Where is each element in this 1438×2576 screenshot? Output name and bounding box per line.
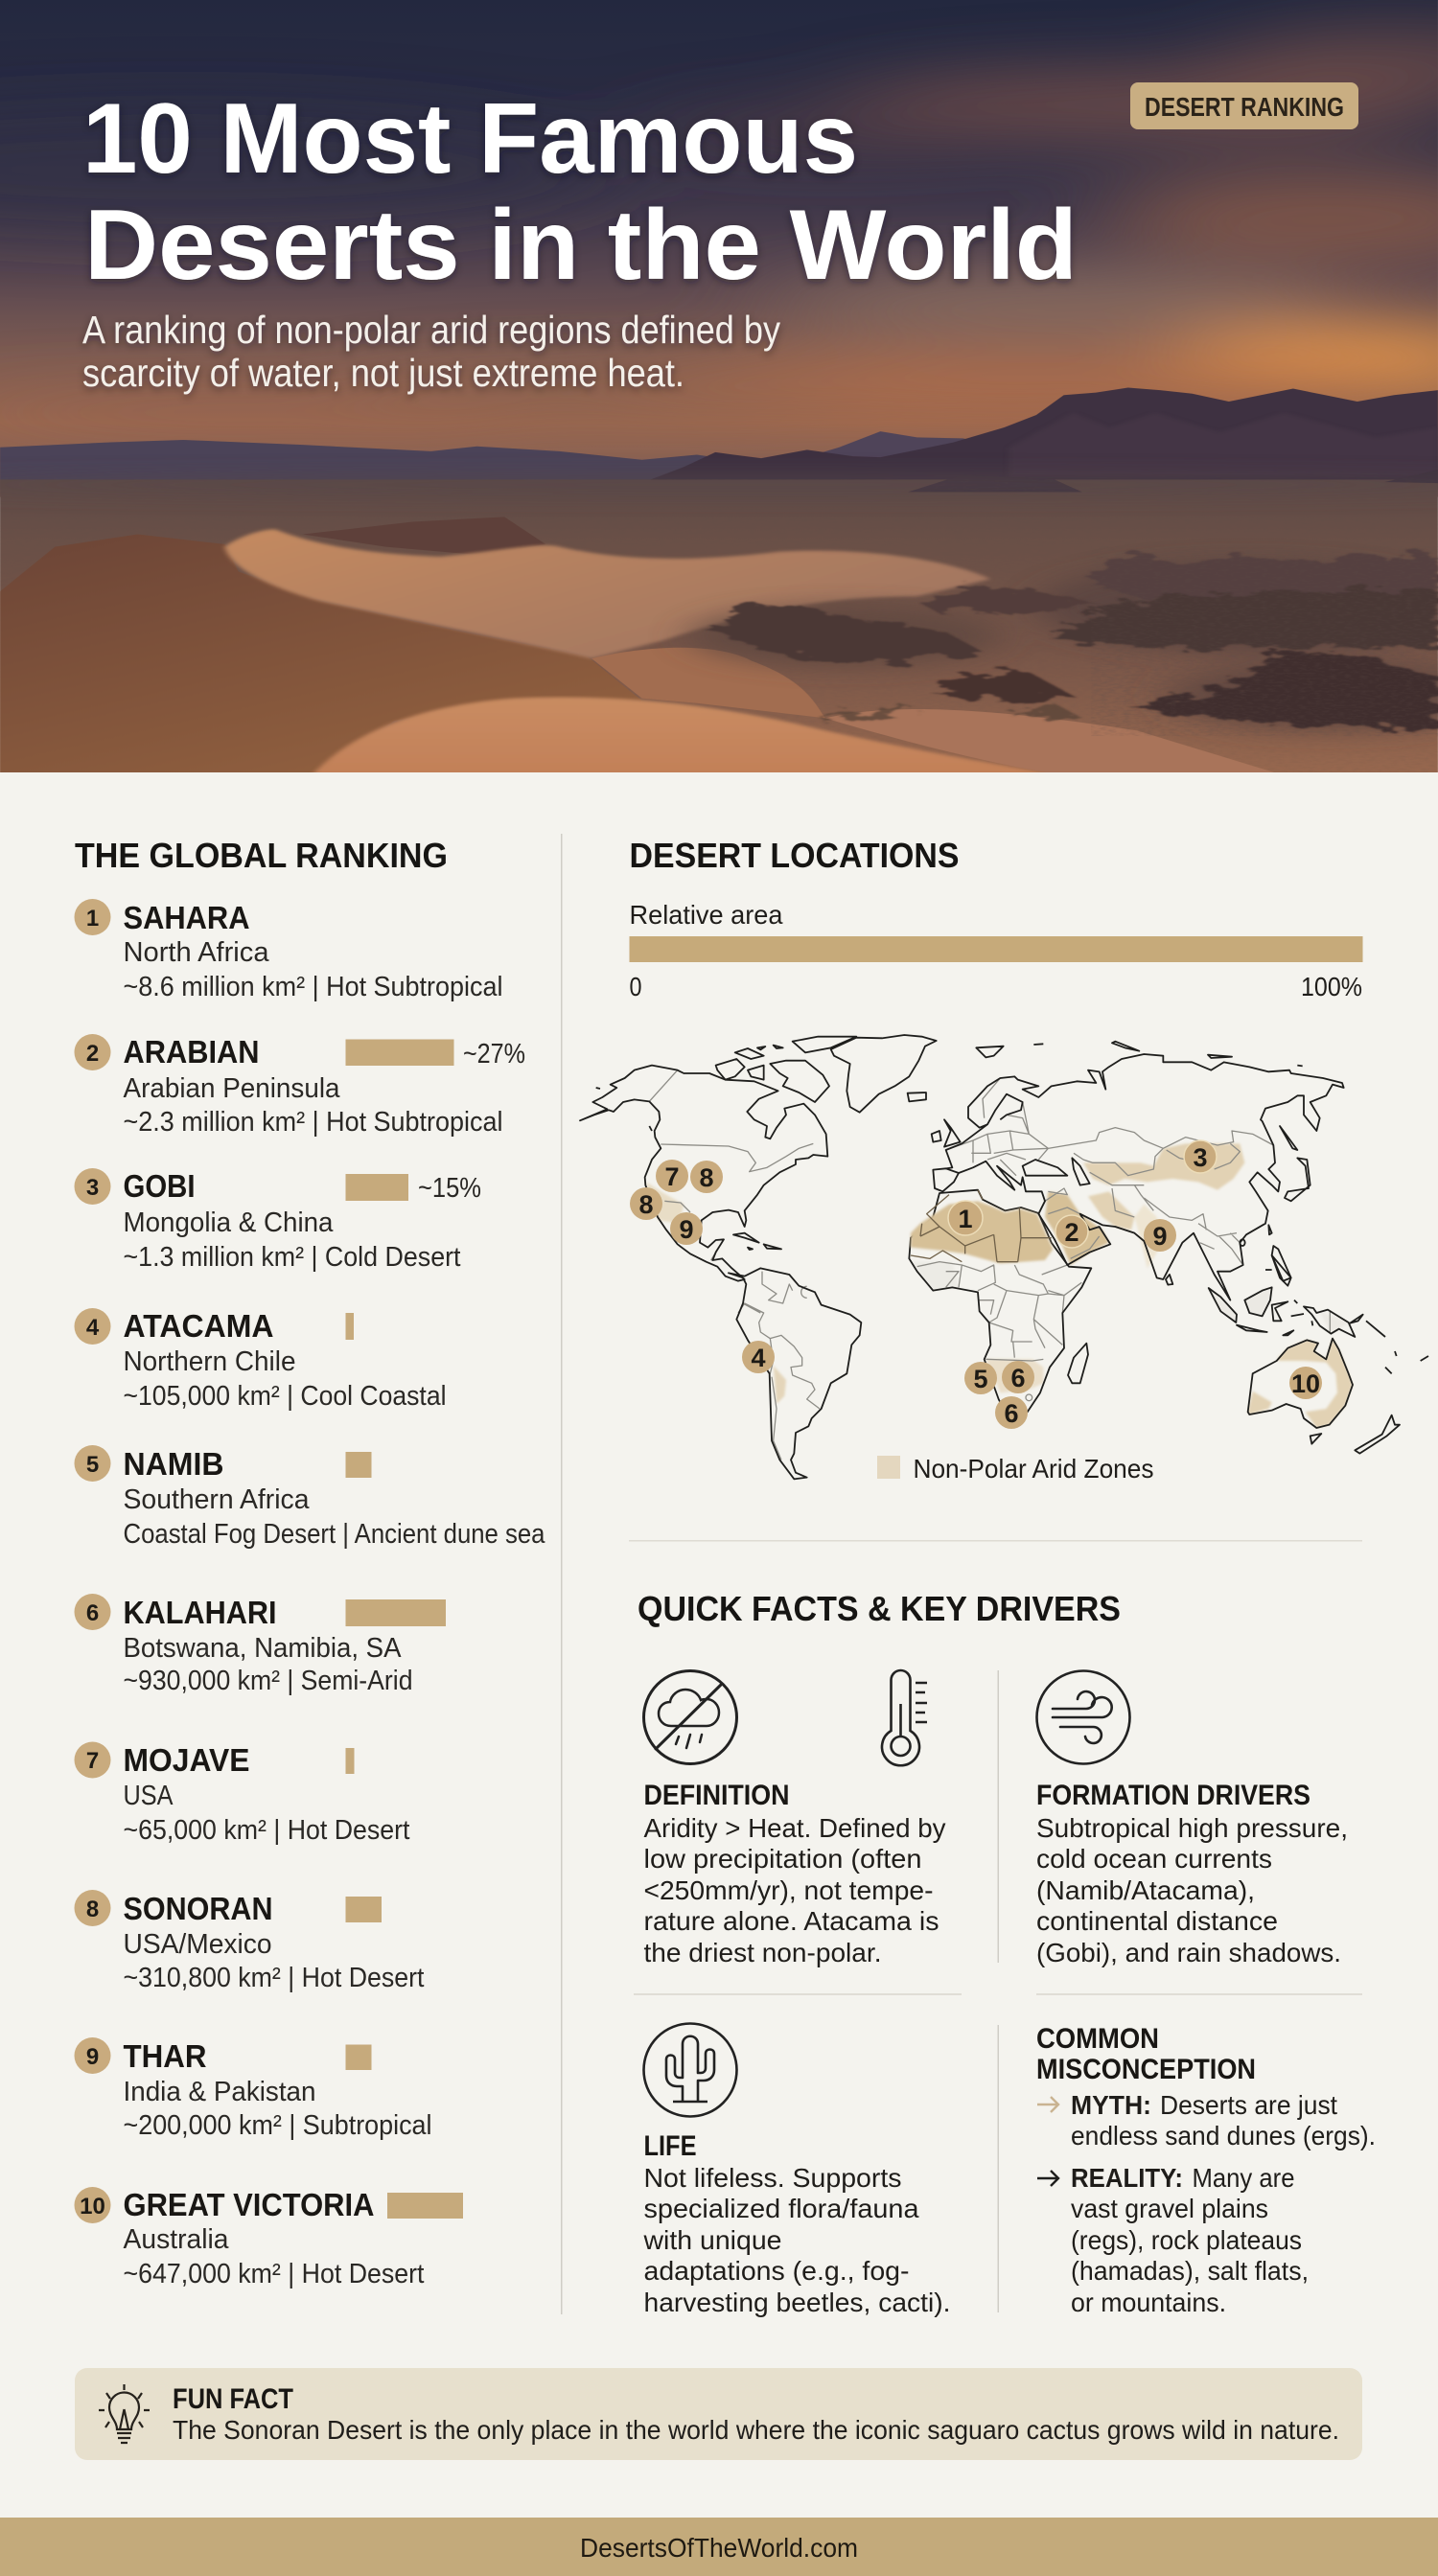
rank 10: Great Victoria: Australia [123, 2224, 229, 2255]
rank 5: Namib: NAMIB [123, 1446, 224, 1482]
rank 2: Arabian: ARABIAN [123, 1034, 259, 1070]
subtitle: scarcity of water, not just extreme heat. [82, 351, 684, 395]
subtitle: A ranking of non-polar arid regions defined by [82, 308, 780, 352]
map markers: 8 [699, 1163, 714, 1192]
block: formation drivers: continental distance [1036, 1906, 1278, 1936]
rank 1: Sahara: SAHARA [123, 900, 249, 935]
map markers: 1 [958, 1205, 973, 1233]
footer bar [0, 2518, 1438, 2576]
rank 2: Arabian [75, 1034, 525, 1138]
rank 4: Atacama: ~105,000 km² | Cool Coastal [123, 1381, 447, 1412]
relative area scale: 0 [629, 972, 642, 1001]
vertical divider lower [997, 2025, 999, 2312]
rank 6: Kalahari [75, 1594, 446, 1696]
rank 7: Mojave: MOJAVE [123, 1742, 249, 1778]
heading: the global ranking: THE GLOBAL RANKING [75, 836, 448, 875]
block: common misconception: Deserts are just [1160, 2090, 1337, 2120]
map markers: 7 [664, 1162, 680, 1191]
hero panel: desert landscape photo [0, 0, 1438, 778]
map markers: 9 [1152, 1222, 1168, 1251]
map markers: 3 [1193, 1143, 1208, 1172]
rank 1: Sahara [75, 899, 502, 1002]
rank 7: Mojave: 7 [86, 1748, 99, 1774]
rank 9: Thar: 9 [86, 2044, 99, 2070]
rank 10: Great Victoria: GREAT VICTORIA [123, 2187, 374, 2222]
block: common misconception: MYTH: [1071, 2090, 1151, 2120]
rank 10: Great Victoria: ~647,000 km² | Hot Desert [123, 2259, 424, 2289]
rank 3: Gobi: ~15% [418, 1173, 481, 1204]
subtitle [82, 308, 780, 395]
rank 6: Kalahari: 6 [86, 1600, 99, 1626]
rank 6: Kalahari: KALAHARI [123, 1595, 276, 1630]
rank 8: Sonoran [75, 1890, 424, 1993]
block: life: harvesting beetles, cacti). [644, 2288, 951, 2317]
title: Deserts in the World [84, 190, 1078, 301]
block: common misconception: or mountains. [1071, 2288, 1226, 2317]
map markers: 9 [679, 1215, 694, 1244]
rank 3: Gobi: Mongolia & China [123, 1208, 334, 1238]
icon: cactus [644, 2024, 736, 2116]
rank 1: Sahara: ~8.6 million km² | Hot Subtropical [123, 972, 502, 1002]
rank 10: Great Victoria: 10 [80, 2194, 105, 2220]
rank 9: Thar: THAR [123, 2038, 207, 2074]
column divider [561, 834, 562, 2314]
rank 2: Arabian: Arabian Peninsula [123, 1073, 340, 1104]
block: definition: DEFINITION [644, 1780, 790, 1811]
block: common misconception: MISCONCEPTION [1036, 2054, 1256, 2085]
arrow: myth [1037, 2097, 1058, 2112]
icon: wind [1037, 1671, 1129, 1763]
fun fact panel [75, 2368, 1362, 2460]
block: life [642, 2130, 951, 2317]
fun fact panel: FUN FACT [173, 2383, 293, 2415]
footer bar: DesertsOfTheWorld.com [580, 2533, 858, 2563]
heading: quick facts: QUICK FACTS & KEY DRIVERS [638, 1589, 1121, 1628]
world map [580, 1035, 1428, 1484]
rank 7: Mojave: USA [123, 1781, 174, 1811]
rank 1: Sahara: North Africa [123, 937, 269, 968]
map: eurasia and north africa [911, 1042, 1344, 1300]
horizontal dividers [634, 1993, 1362, 1995]
rank 9: Thar [75, 2037, 431, 2141]
block: formation drivers: cold ocean currents [1036, 1844, 1272, 1874]
rank 5: Namib: Southern Africa [123, 1484, 310, 1515]
relative area scale [629, 900, 1363, 1001]
map markers: 5 [973, 1365, 988, 1393]
block: definition: low precipitation (often [644, 1844, 922, 1874]
rank 8: Sonoran: 8 [86, 1897, 99, 1922]
map legend: Non-Polar Arid Zones [913, 1454, 1154, 1484]
block: life: Not lifeless. Supports [644, 2163, 901, 2193]
block: life: adaptations (e.g., fog- [644, 2256, 909, 2286]
arrow: reality [1037, 2171, 1058, 2186]
map markers: 4 [751, 1344, 766, 1372]
map markers: 2 [1064, 1218, 1079, 1247]
block: definition: <250mm/yr), not tempe- [644, 1875, 934, 1905]
relative area scale: 100% [1301, 972, 1362, 1001]
rank 3: Gobi: ~1.3 million km² | Cold Desert [123, 1242, 460, 1273]
rank 9: Thar: ~200,000 km² | Subtropical [123, 2110, 431, 2141]
block: common misconception [1036, 2023, 1376, 2317]
block: definition: Aridity > Heat. Defined by [644, 1813, 945, 1843]
rank 7: Mojave: ~65,000 km² | Hot Desert [123, 1815, 410, 1846]
block: common misconception: (regs), rock plateaus [1071, 2225, 1302, 2255]
block: definition [644, 1780, 945, 1967]
rank 3: Gobi: GOBI [123, 1168, 196, 1204]
fun fact panel: The Sonoran Desert is the only place in the world where the iconic saguaro cactus grows wild in nature. [173, 2415, 1339, 2445]
block: common misconception: (hamadas), salt flats, [1071, 2256, 1309, 2286]
rank 5: Namib [75, 1445, 545, 1550]
block: common misconception: Many are [1193, 2163, 1294, 2193]
block: common misconception: COMMON [1036, 2023, 1159, 2055]
heading: desert locations: DESERT LOCATIONS [629, 836, 959, 875]
map: south america and southern africa [729, 1190, 1091, 1479]
badge: desert ranking: DESERT RANKING [1145, 92, 1344, 122]
rank 6: Kalahari: Botswana, Namibia, SA [123, 1633, 402, 1664]
rank 7: Mojave [75, 1742, 410, 1846]
rank 4: Atacama: Northern Chile [123, 1346, 295, 1377]
block: life: specialized flora/fauna [644, 2194, 919, 2223]
map markers [630, 1140, 1322, 1429]
block: formation drivers: (Gobi), and rain shadows. [1036, 1938, 1341, 1967]
title [82, 83, 1078, 301]
block: common misconception: endless sand dunes (ergs). [1071, 2121, 1376, 2150]
title: 10 Most Famous [82, 83, 858, 195]
relative area scale: Relative area [629, 900, 783, 930]
rank 1: Sahara: 1 [86, 906, 99, 932]
rank 4: Atacama [75, 1308, 447, 1412]
rank 2: Arabian: ~2.3 million km² | Hot Subtropical [123, 1107, 502, 1138]
rank 4: Atacama: ATACAMA [123, 1308, 274, 1344]
rank 8: Sonoran: USA/Mexico [123, 1929, 272, 1960]
rank 8: Sonoran: SONORAN [123, 1891, 272, 1926]
block: life: with unique [642, 2225, 782, 2255]
map markers: 10 [1291, 1369, 1320, 1398]
block: life: LIFE [644, 2130, 696, 2162]
rank 5: Namib: 5 [86, 1452, 99, 1478]
icon: no rain [644, 1671, 736, 1763]
rank 4: Atacama: 4 [86, 1315, 100, 1341]
rank 2: Arabian: ~27% [463, 1039, 525, 1070]
map: oceania and southeast asia islands [1209, 1255, 1428, 1454]
ranking list [75, 899, 545, 2289]
block: definition: the driest non-polar. [644, 1938, 882, 1967]
block: common misconception: vast gravel plains [1071, 2194, 1268, 2223]
rank 6: Kalahari: ~930,000 km² | Semi-Arid [123, 1666, 412, 1696]
rank 5: Namib: Coastal Fog Desert | Ancient dune sea [123, 1519, 545, 1550]
map markers: 8 [638, 1190, 654, 1219]
block: definition: rature alone. Atacama is [644, 1906, 939, 1936]
block: formation drivers: FORMATION DRIVERS [1036, 1780, 1310, 1811]
rank 3: Gobi [75, 1168, 481, 1273]
vertical divider upper [997, 1670, 999, 1963]
divider [629, 1540, 1362, 1541]
block: formation drivers: (Namib/Atacama), [1036, 1875, 1255, 1905]
map: north america [580, 1035, 937, 1281]
rank 3: Gobi: 3 [86, 1175, 99, 1201]
icon: lightbulb [99, 2384, 150, 2443]
map markers: 6 [1004, 1399, 1019, 1428]
rank 9: Thar: India & Pakistan [123, 2077, 316, 2107]
block: common misconception: REALITY: [1071, 2163, 1183, 2193]
rank 2: Arabian: 2 [86, 1041, 99, 1067]
icon: thermometer [882, 1670, 927, 1765]
block: formation drivers: Subtropical high pressure, [1036, 1813, 1348, 1843]
badge: desert ranking [1130, 82, 1358, 129]
map markers: 6 [1010, 1364, 1026, 1392]
rank 8: Sonoran: ~310,800 km² | Hot Desert [123, 1963, 424, 1993]
block: formation drivers [1036, 1780, 1348, 1967]
rank 10: Great Victoria [75, 2187, 463, 2289]
